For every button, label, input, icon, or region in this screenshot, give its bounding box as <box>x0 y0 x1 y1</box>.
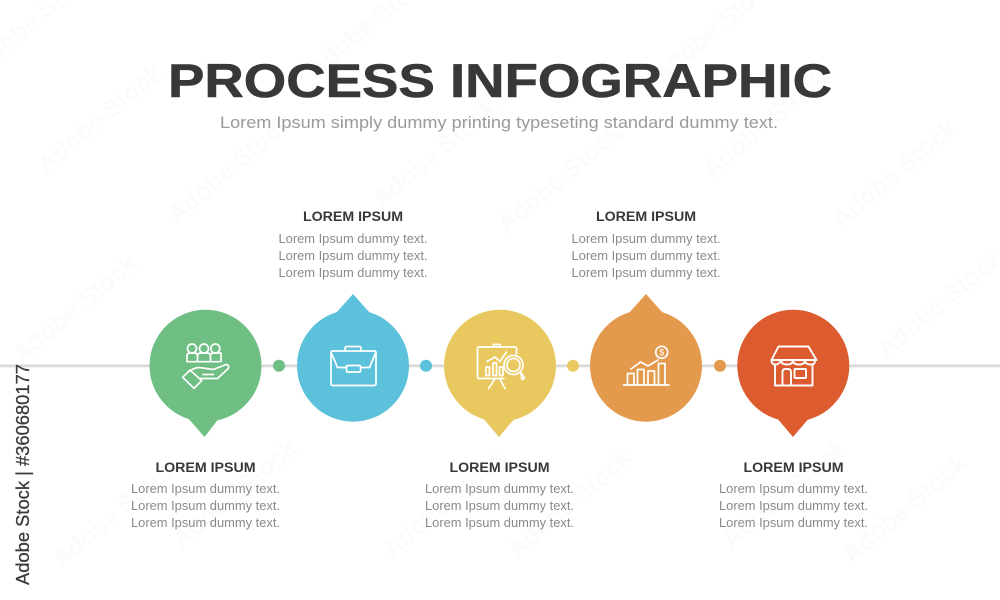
step 3 marker: yellow pin with presentation icon <box>444 310 556 437</box>
text block: step 1 <box>131 460 280 530</box>
text block: step 1: Lorem Ipsum dummy text. <box>131 481 280 496</box>
subtitle: Lorem Ipsum simply dummy printing typeseting standard dummy text. <box>220 114 778 132</box>
text block: step 5: Lorem Ipsum dummy text. <box>719 515 868 530</box>
watermark pattern: Adobe Stock <box>32 59 167 179</box>
text block: step 2: Lorem Ipsum dummy text. <box>278 231 428 246</box>
text block: step 3 <box>425 460 574 530</box>
timeline line <box>0 364 1000 367</box>
connector dot: green <box>273 360 285 372</box>
watermark pattern: Adobe Stock <box>367 94 502 214</box>
text block: step 4 <box>571 209 721 280</box>
watermark pattern: Adobe Stock <box>827 114 962 234</box>
text block: step 1: Lorem Ipsum dummy text. <box>131 515 280 530</box>
watermark pattern: Adobe Stock <box>47 454 182 574</box>
title: PROCESS INFOGRAPHIC <box>168 54 832 107</box>
text block: step 3: LOREM IPSUM <box>449 460 550 476</box>
text block: step 5 <box>719 460 868 530</box>
connector dot: blue <box>420 360 432 372</box>
watermark pattern: Adobe Stock <box>377 444 512 564</box>
step 5 marker: red-orange pin with shop icon <box>737 310 849 437</box>
text block: step 2: Lorem Ipsum dummy text. <box>278 265 428 280</box>
text block: step 2 <box>278 209 428 280</box>
connector dot: orange <box>714 360 726 372</box>
icon: rising bar chart with dollar coin: $ <box>659 348 664 358</box>
text block: step 5: Lorem Ipsum dummy text. <box>719 498 868 513</box>
text block: step 1: LOREM IPSUM <box>155 460 256 476</box>
text block: step 2: LOREM IPSUM <box>303 209 403 225</box>
text block: step 4: Lorem Ipsum dummy text. <box>571 248 721 263</box>
text block: step 3: Lorem Ipsum dummy text. <box>425 498 574 513</box>
stock credit: Adobe Stock | #360680177 <box>12 364 33 585</box>
watermark pattern: Adobe Stock <box>697 64 832 184</box>
icon: storefront <box>772 346 816 386</box>
text block: step 4: LOREM IPSUM <box>596 209 696 225</box>
watermark pattern: Adobe Stock <box>7 249 142 369</box>
watermark pattern: Adobe Stock <box>492 119 627 239</box>
step 4 marker: orange pin with growth chart icon <box>590 294 702 422</box>
icon: people on hand <box>183 344 229 388</box>
text block: step 3: Lorem Ipsum dummy text. <box>425 515 574 530</box>
text block: step 2: Lorem Ipsum dummy text. <box>278 248 428 263</box>
text block: step 5: Lorem Ipsum dummy text. <box>719 481 868 496</box>
text block: step 5: LOREM IPSUM <box>743 460 844 476</box>
text block: step 1: Lorem Ipsum dummy text. <box>131 498 280 513</box>
watermark pattern: Adobe Stock <box>837 449 972 569</box>
watermark pattern: Adobe Stock <box>717 434 852 554</box>
text block: step 3: Lorem Ipsum dummy text. <box>425 481 574 496</box>
icon: briefcase <box>331 346 376 386</box>
icon: presentation board and magnifier <box>478 344 524 388</box>
watermark pattern: Adobe Stock <box>502 444 637 564</box>
text block: step 4: Lorem Ipsum dummy text. <box>571 231 721 246</box>
connector dot: yellow <box>567 360 579 372</box>
step 2 marker: blue pin with briefcase icon <box>297 294 409 422</box>
watermark pattern: Adobe Stock <box>167 434 302 554</box>
text block: step 4: Lorem Ipsum dummy text. <box>571 265 721 280</box>
watermark pattern: Adobe Stock <box>162 109 297 229</box>
step 1 marker: green pin with hand and people icon <box>150 310 262 437</box>
